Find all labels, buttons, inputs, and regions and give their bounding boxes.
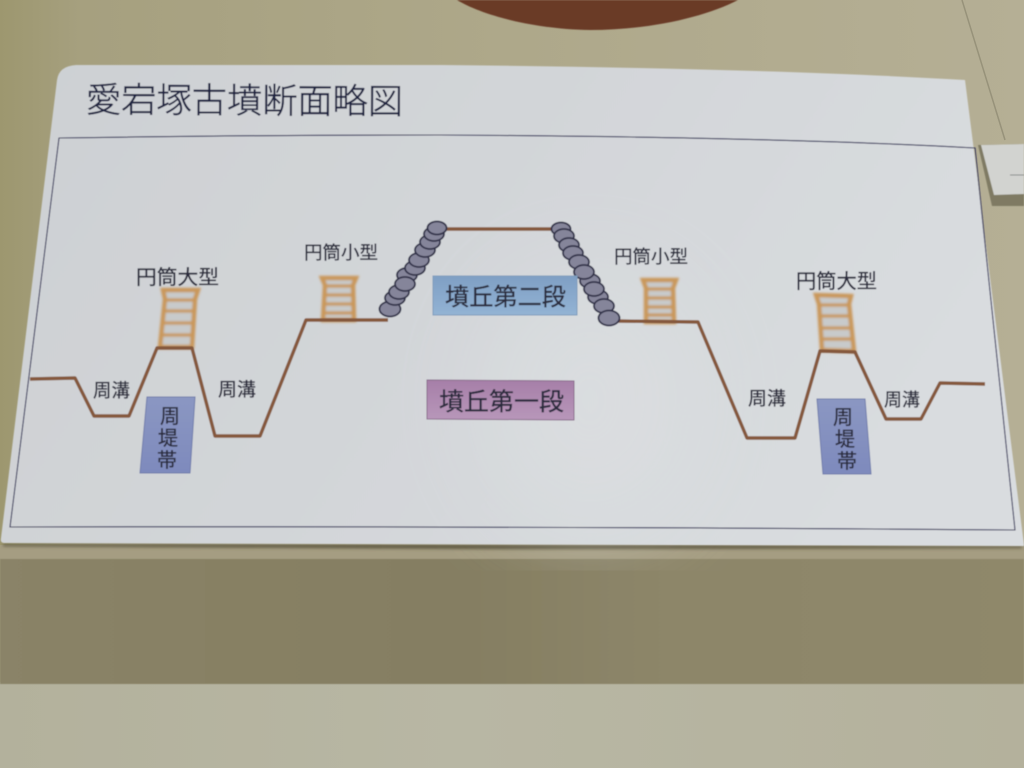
label box: embankment right bbox=[817, 399, 871, 474]
stones: left slope bbox=[380, 222, 446, 316]
label box: mound first tier bbox=[427, 380, 574, 420]
small side card bbox=[978, 144, 1024, 206]
label: large cylinder right: 円筒大型 bbox=[796, 270, 877, 293]
card bright patch bbox=[480, 270, 700, 530]
label box: mound second tier: 墳丘第二段 bbox=[445, 284, 566, 311]
label: large cylinder left: 円筒大型 bbox=[136, 266, 219, 289]
cross-section profile: left side bbox=[30, 320, 388, 436]
label box: embankment left bbox=[140, 397, 195, 473]
panel: cross-section card bbox=[1, 65, 1024, 546]
plinth top ledge bbox=[0, 545, 1024, 560]
icon: small cylinder haniwa left bbox=[322, 278, 356, 320]
card shadow bbox=[3, 544, 1022, 549]
label: moat 2: 周溝 bbox=[218, 379, 256, 400]
label: moat 3: 周溝 bbox=[748, 388, 786, 409]
background wall bbox=[0, 0, 1024, 560]
label box: mound first tier: 墳丘第一段 bbox=[439, 388, 564, 416]
label box: embankment left: 帯 bbox=[157, 449, 177, 472]
label box: embankment left: 周 bbox=[160, 406, 180, 428]
label box: embankment right: 周 bbox=[833, 407, 853, 429]
plinth box bbox=[0, 559, 1024, 684]
label: small cylinder left: 円筒小型 bbox=[304, 243, 378, 263]
diagram frame bbox=[10, 135, 1015, 530]
icon: small cylinder haniwa right bbox=[643, 280, 676, 322]
label: moat 4: 周溝 bbox=[884, 390, 920, 410]
stones: right slope bbox=[552, 222, 620, 326]
label: moat 1: 周溝 bbox=[93, 380, 130, 401]
label box: embankment right: 帯 bbox=[837, 450, 857, 473]
label: small cylinder right: 円筒小型 bbox=[614, 247, 688, 267]
label box: embankment right: 堤 bbox=[835, 428, 855, 451]
label box: embankment left: 堤 bbox=[158, 427, 178, 450]
title: 愛宕塚古墳断面略図 bbox=[86, 81, 403, 122]
icon: large cylinder haniwa left bbox=[160, 290, 198, 347]
brown artifact bbox=[457, 0, 738, 30]
icon: large cylinder haniwa right bbox=[816, 295, 854, 351]
wall seam bbox=[962, 0, 1005, 140]
label box: mound second tier bbox=[433, 276, 577, 315]
floor strip bbox=[0, 682, 1024, 768]
cross-section profile: mound top bbox=[445, 227, 555, 231]
cross-section profile: right side bbox=[616, 321, 985, 438]
